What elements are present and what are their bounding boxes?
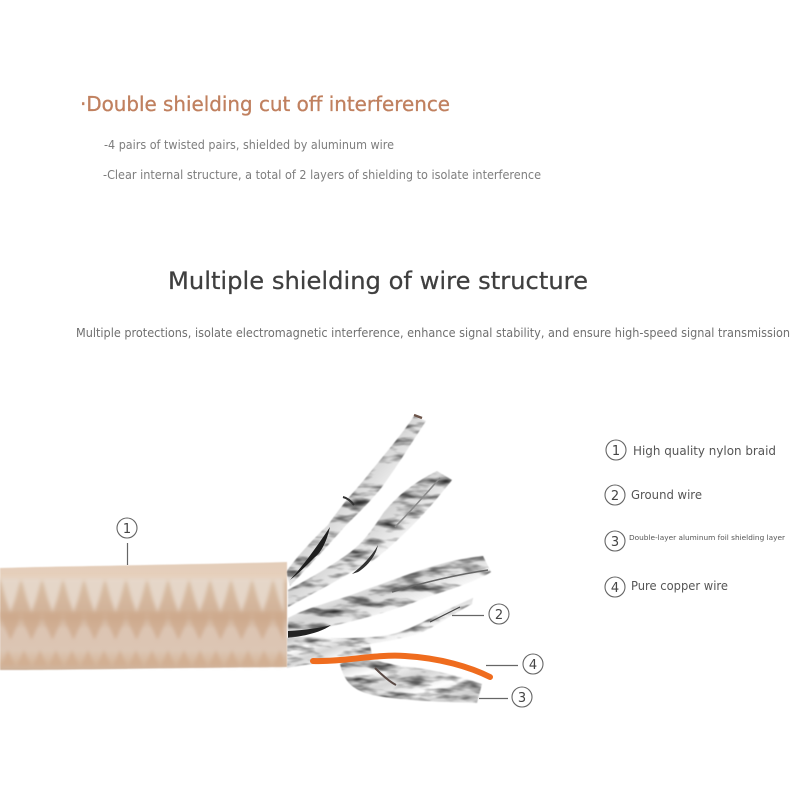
orange copper wire: [313, 656, 490, 677]
legend item 1: [606, 440, 776, 460]
strand: bottom foil shield: [340, 659, 482, 703]
strand: third foil pair: [288, 556, 491, 638]
legend item 1: 1: [612, 444, 620, 459]
callout: 2 on cable: [452, 604, 509, 624]
text block: internal structure: -Clear internal structure, a total of 2 layers of shielding to isolate interference: [103, 168, 541, 182]
callout: 2 on cable: 2: [495, 608, 503, 623]
legend item 3: [605, 531, 785, 551]
legend item 3: 3: [611, 535, 619, 550]
text block: twisted pairs: -4 pairs of twisted pairs, shielded by aluminum wire: [104, 138, 394, 152]
legend item 4: 4: [611, 581, 619, 596]
legend item 2: Ground wire: [631, 488, 702, 502]
callout: 3 on cable: [479, 687, 532, 707]
strand: frayed foil near jacket: [287, 637, 372, 668]
strand: top foil pair: [286, 415, 426, 586]
strand: second foil pair: [288, 471, 452, 607]
legend item 4: [605, 577, 728, 597]
legend item 3: Double-layer aluminum foil shielding layer: [629, 534, 785, 542]
legend item 1: High quality nylon braid: [633, 444, 776, 458]
cable illustration: [0, 415, 491, 703]
strand: ground wire: [288, 598, 473, 662]
legend item 4: Pure copper wire: [631, 579, 728, 593]
heading: double shielding: ·Double shielding cut off interference: [80, 92, 450, 116]
callout: 1 on cable: [117, 518, 137, 565]
legend item 2: [605, 485, 702, 505]
title: Multiple shielding of wire structure: [168, 267, 588, 295]
callout: 3 on cable: 3: [518, 691, 526, 706]
callout: 1 on cable: 1: [123, 522, 131, 537]
braided jacket: [0, 562, 287, 670]
callout: 4 on cable: [486, 654, 543, 674]
callout: 4 on cable: 4: [529, 658, 537, 673]
legend item 2: 2: [611, 489, 619, 504]
